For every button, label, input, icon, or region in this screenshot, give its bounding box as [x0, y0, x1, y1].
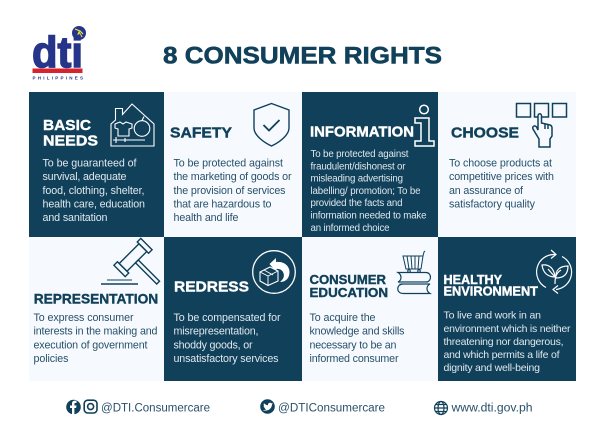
body text: choose	[449, 158, 554, 210]
body text: redress: misrepresentation,	[174, 326, 259, 338]
heading: healthy environment: HEALTHY	[444, 272, 502, 287]
body text: basic needs: and sanitation	[42, 212, 108, 224]
heading: choose: CHOOSE	[451, 124, 519, 142]
footer: social media and website	[66, 399, 532, 415]
heading: consumer education	[310, 272, 388, 300]
heading: representation: REPRESENTATION	[34, 290, 158, 306]
body text: basic needs: survival, adequate	[42, 171, 127, 183]
body text: information: an informed choice	[310, 223, 390, 234]
body text: representation: policies	[34, 353, 68, 365]
icon: instagram	[84, 400, 97, 413]
heading: basic needs	[43, 117, 98, 149]
heading: information: INFORMATION	[310, 124, 414, 140]
heading: basic needs: NEEDS	[43, 132, 98, 149]
panel: consumer education	[302, 237, 438, 381]
panel: information	[302, 92, 438, 237]
text: twitter handle: @DTIConsumercare	[278, 403, 385, 415]
body text: choose: To choose products at	[449, 158, 552, 170]
body text: representation	[34, 312, 158, 365]
body text: safety: health and life	[174, 212, 239, 224]
body text: representation: interests in the making and	[34, 326, 158, 338]
body text: safety: To be protected against	[174, 158, 283, 170]
body text: information: information needed to make	[310, 210, 426, 222]
body text: information: fraudulent/dishonest or	[310, 161, 406, 172]
body text: healthy environment: To live and work in an	[444, 310, 541, 322]
body text: redress: To be compensated for	[174, 312, 281, 324]
icon: facebook	[66, 400, 81, 414]
body text: consumer education: To acquire the	[310, 312, 376, 324]
panel: safety	[164, 92, 302, 237]
body text: basic needs: To be guaranteed of	[42, 158, 137, 170]
icon: house with shirt, apple and syringe	[111, 104, 154, 146]
icon: letter i	[415, 105, 434, 146]
heading: healthy environment: ENVIRONMENT	[444, 284, 538, 299]
body text: information: provided the facts and	[310, 198, 402, 209]
icon: gavel	[101, 238, 172, 296]
body text: information	[310, 149, 426, 234]
body text: choose: an assurance of	[449, 185, 523, 197]
panel: basic needs	[29, 92, 164, 237]
body text: safety: the marketing of goods or	[174, 171, 292, 183]
body text: choose: satisfactory quality	[449, 198, 536, 210]
body text: healthy environment	[444, 310, 571, 374]
body text: information: To be protected against	[310, 149, 409, 160]
body text: healthy environment: dignity and well-being	[444, 362, 540, 374]
logo: DTI Philippines: PHILIPPINES	[32, 76, 83, 80]
body text: safety	[174, 158, 292, 224]
body text: redress: shoddy goods, or	[174, 339, 253, 351]
body text: healthy environment: threatening nor dangerous,	[444, 336, 564, 348]
heading: safety: SAFETY	[170, 125, 232, 142]
icon: shopping cart on books	[398, 251, 430, 294]
body text: consumer education	[310, 312, 404, 365]
body text: information: misleading advertising	[310, 174, 403, 185]
heading: redress: REDRESS	[174, 279, 249, 296]
icon: globe	[434, 402, 448, 414]
body text: consumer education: necessary to be an	[310, 339, 397, 351]
icon: hand selecting box	[516, 104, 566, 147]
icon: twitter	[260, 399, 275, 414]
body text: basic needs	[42, 158, 145, 224]
panel: healthy environment	[438, 237, 576, 381]
body text: consumer education: informed consumer	[310, 353, 399, 365]
panel: choose	[438, 92, 576, 237]
body text: representation: To express consumer	[34, 312, 134, 324]
icon: shield with check	[254, 104, 289, 146]
body text: healthy environment: environment which is neither	[444, 323, 571, 335]
body text: information: labelling/ promotion; To be	[310, 186, 420, 197]
text: website: www.dti.gov.ph	[450, 403, 532, 415]
icon: returned parcel in circle	[253, 251, 295, 293]
heading: healthy environment	[444, 272, 538, 299]
body text: basic needs: food, clothing, shelter,	[42, 185, 145, 197]
body text: representation: execution of government	[34, 339, 148, 351]
body text: safety: the provision of services	[174, 185, 286, 197]
body text: consumer education: knowledge and skills	[310, 326, 404, 338]
body text: healthy environment: and which permits a life of	[444, 349, 560, 361]
heading: basic needs: BASIC	[43, 117, 91, 134]
body text: basic needs: health care, education	[42, 198, 145, 210]
heading: consumer education: EDUCATION	[310, 285, 388, 300]
heading: consumer education: CONSUMER	[310, 272, 386, 287]
title: 8 CONSUMER RIGHTS	[163, 42, 442, 70]
body text: redress	[174, 312, 281, 365]
text: facebook and instagram handle: @DTI.Consumercare	[101, 403, 210, 415]
logo: DTI Philippines: dti	[32, 28, 83, 77]
panel: representation	[29, 237, 172, 381]
body text: choose: competitive prices with	[449, 171, 554, 183]
panel: redress	[164, 237, 302, 381]
body text: redress: unsatisfactory services	[174, 353, 278, 365]
body text: safety: that are hazardous to	[174, 198, 272, 210]
icon: leaves with circular arrows	[537, 250, 572, 294]
